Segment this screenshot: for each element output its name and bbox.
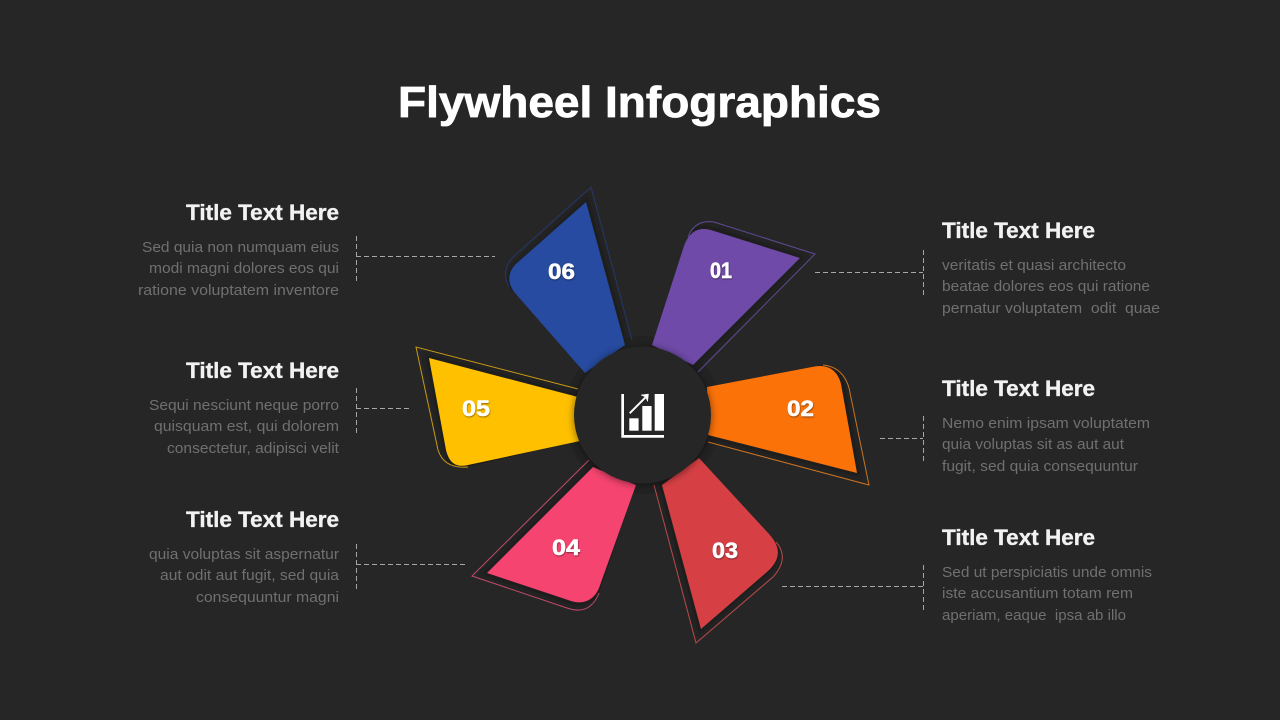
ring behind hub <box>564 336 722 494</box>
wedge 06 blue <box>506 187 632 373</box>
wedge 04 pink <box>472 460 636 610</box>
text block 06: modi magni dolores eos qui <box>149 260 339 277</box>
text block 03: Sed ut perspiciatis unde omnis <box>942 564 1152 581</box>
text block 03 <box>942 525 1152 624</box>
number 05: 05 <box>462 396 490 421</box>
number 01: 01 <box>710 258 732 283</box>
icon: bar chart with arrow <box>621 394 664 438</box>
connector 03 <box>782 565 924 612</box>
text block 03: iste accusantium totam rem <box>942 585 1133 602</box>
wedge 02 orange <box>707 365 869 485</box>
text block 05: Title Text Here <box>186 358 339 383</box>
number 06: 06 <box>548 259 575 284</box>
wedge 01 purple <box>652 222 815 372</box>
text block 03: aperiam, eaque ipsa ab illo <box>942 607 1126 624</box>
text block 04 <box>149 507 340 606</box>
text block 06: ratione voluptatem inventore <box>138 282 339 299</box>
text block 04: aut odit aut fugit, sed quia <box>160 567 340 584</box>
number 03: 03 <box>712 538 738 563</box>
text block 05: Sequi nesciunt neque porro <box>149 397 339 414</box>
text block 02: quia voluptas sit as aut aut <box>942 436 1125 453</box>
title: Flywheel Infographics <box>398 78 881 127</box>
text block 02 <box>942 376 1150 475</box>
connector 02 <box>880 416 924 464</box>
text block 06: Title Text Here <box>186 200 339 225</box>
connector 04 <box>356 544 467 590</box>
text block 02: Title Text Here <box>942 376 1095 401</box>
text block 02: fugit, sed quia consequuntur <box>942 458 1138 475</box>
text block 02: Nemo enim ipsam voluptatem <box>942 415 1150 432</box>
connector 01 <box>815 250 924 298</box>
text block 05: quisquam est, qui dolorem <box>154 418 339 435</box>
wedge 05 yellow <box>416 347 580 467</box>
center hub <box>574 346 711 484</box>
text block 04: quia voluptas sit aspernatur <box>149 546 339 563</box>
text block 06: Sed quia non numquam eius <box>142 239 339 256</box>
text block 03: Title Text Here <box>942 525 1095 550</box>
text block 01: beatae dolores eos qui ratione <box>942 278 1150 295</box>
text block 05: consectetur, adipisci velit <box>167 440 340 457</box>
text block 01: pernatur voluptatem odit quae <box>942 300 1160 317</box>
number 02: 02 <box>787 396 814 421</box>
wedge 03 red <box>654 458 782 643</box>
number 04: 04 <box>552 535 581 560</box>
text block 05 <box>149 358 340 457</box>
text block 01: Title Text Here <box>942 218 1095 243</box>
text block 06 <box>138 200 339 299</box>
connector 06 <box>356 236 495 282</box>
text block 01 <box>942 218 1160 317</box>
text block 04: consequuntur magni <box>196 589 339 606</box>
connector 05 <box>356 388 410 434</box>
text block 01: veritatis et quasi architecto <box>942 257 1126 274</box>
text block 04: Title Text Here <box>186 507 339 532</box>
